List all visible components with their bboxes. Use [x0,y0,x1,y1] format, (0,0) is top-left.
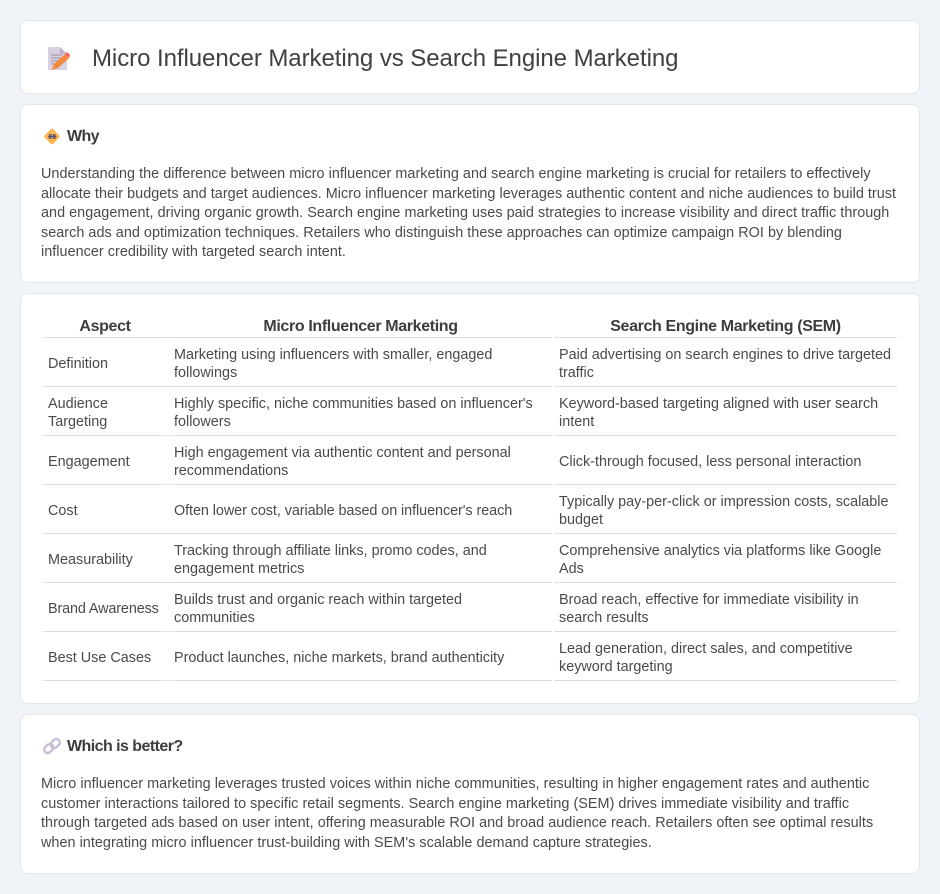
row: engagement: recommendations [174,463,288,479]
row: brand awareness: search results [559,610,649,626]
row: definition: traffic [559,365,594,381]
panel: which is better [20,714,920,874]
row: audience targeting: intent [559,414,594,430]
row: definition: Paid advertising on search engines to drive targeted [559,347,891,363]
row: best use cases: keyword targeting [559,659,673,675]
row: measurability: Comprehensive analytics via platforms like Google [559,543,881,559]
row: best use cases: Best Use Cases [48,650,151,666]
row: brand awareness: Brand Awareness [48,601,159,617]
row: measurability: engagement metrics [174,561,304,577]
icon: document with pencil [48,47,70,70]
row: brand awareness [43,592,897,632]
row: engagement: Engagement [48,454,130,470]
row: definition: Definition [48,356,108,372]
row: cost: Cost [48,503,78,519]
which is better paragraph: through targeted ads based on user intent, offering measurable ROI and broad audience reach. Retailers often see optimal results [41,815,873,831]
panel: comparison table [20,293,920,704]
which is better paragraph: customer interactions tailored to specific retail segments. Search engine marketing (SEM) drives immediate visibility and traffic [41,796,849,812]
table header [43,318,897,338]
row: brand awareness: Builds trust and organic reach within targeted [174,592,462,608]
table header: Search Engine Marketing (SEM) [610,318,841,335]
why paragraph: search ads and optimization techniques. Retailers who distinguish these approaches can optimize campaign ROI by blending [41,225,842,241]
why paragraph [41,166,896,260]
heading: which is better: Which is better? [67,738,183,755]
row: cost: Typically pay-per-click or impression costs, scalable [559,494,888,510]
row: cost: budget [559,512,603,528]
why paragraph: and engagement, driving organic growth. Search engine marketing uses paid strategies to increase visibility and direct traffic through [41,205,889,221]
row: engagement: High engagement via authentic content and personal [174,445,511,461]
why paragraph: Understanding the difference between micro influencer marketing and search engine marketing is crucial for retailers to effectively [41,166,871,182]
row: audience targeting: followers [174,414,231,430]
row: cost: Often lower cost, variable based on influencer's reach [174,503,512,519]
row: brand awareness: communities [174,610,255,626]
panel: why [20,104,920,283]
table header: Aspect [79,318,131,335]
row: audience targeting: Keyword-based targeting aligned with user search [559,396,878,412]
icon: warning diamond [44,128,60,144]
row: brand awareness: Broad reach, effective for immediate visibility in [559,592,859,608]
why paragraph: allocate their budgets and target audiences. Micro influencer marketing leverages authentic content and niche audiences to build trust [41,186,896,202]
row: best use cases [43,641,897,681]
row: measurability [43,543,897,583]
row: engagement: Click-through focused, less personal interaction [559,454,861,470]
row: definition [43,347,897,387]
which is better paragraph [41,776,873,851]
title card [20,20,920,94]
row: definition: Marketing using influencers with smaller, engaged [174,347,492,363]
row: audience targeting: Audience [48,396,108,412]
which is better paragraph: Micro influencer marketing leverages trusted voices within niche communities, resulting in higher engagement rates and authentic [41,776,869,792]
row: measurability: Tracking through affiliate links, promo codes, and [174,543,487,559]
row: best use cases: Product launches, niche markets, brand authenticity [174,650,504,666]
row: cost [43,494,897,534]
icon: chain link [43,738,61,754]
why paragraph: influencer credibility with targeted search intent. [41,244,346,260]
heading: why: Why [67,128,99,145]
page title: Micro Influencer Marketing vs Search Engine Marketing [92,45,678,72]
which is better paragraph: when integrating micro influencer trust-building with SEM's scalable demand capture strategies. [41,835,652,851]
table header: Micro Influencer Marketing [263,318,458,335]
row: engagement [43,445,897,485]
row: measurability: Ads [559,561,584,577]
row: measurability: Measurability [48,552,133,568]
row: best use cases: Lead generation, direct sales, and competitive [559,641,853,657]
row: audience targeting [43,396,897,436]
row: audience targeting: Highly specific, niche communities based on influencer's [174,396,533,412]
row: definition: followings [174,365,237,381]
row: audience targeting: Targeting [48,414,107,430]
